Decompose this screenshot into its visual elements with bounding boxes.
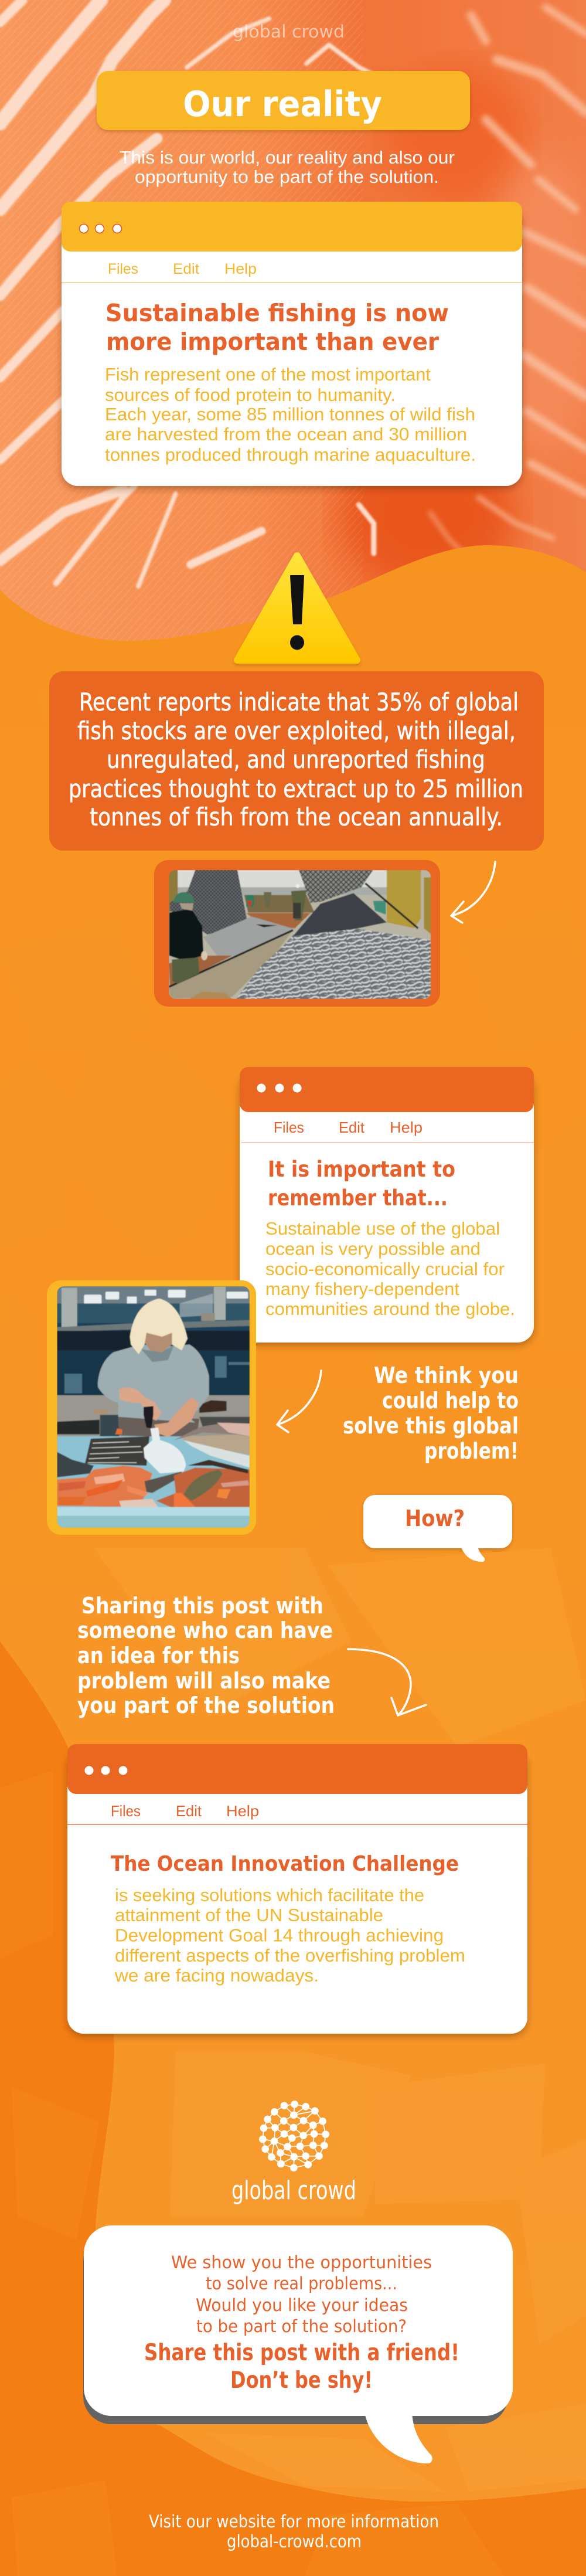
window body text: attainment of the UN Sustainable — [115, 1905, 383, 1925]
text: we think you could help: We think you — [374, 1362, 519, 1388]
text: sharing this post: problem will also make — [77, 1668, 331, 1694]
title banner — [97, 71, 470, 130]
window header — [62, 202, 522, 252]
window dots — [257, 1083, 301, 1093]
text: sharing this post: someone who can have — [77, 1617, 333, 1643]
window body text: Development Goal 14 through achieving — [115, 1925, 444, 1945]
title text: Our reality — [183, 84, 382, 125]
panel: window it is important — [240, 1067, 534, 1343]
window body text: Fish represent one of the most important — [105, 364, 431, 385]
window heading: Sustainable fishing is now — [105, 299, 449, 327]
bubble message: to solve real problems... — [206, 2273, 397, 2293]
text: we think you could help: could help to — [382, 1388, 519, 1413]
report text: tonnes of fish from the ocean annually. — [90, 803, 503, 831]
window header — [240, 1067, 534, 1112]
window dots — [84, 1766, 128, 1775]
window body text: we are facing nowadays. — [114, 1965, 319, 1986]
subtitle — [120, 147, 455, 187]
window body text: tonnes produced through marine aquaculture. — [105, 444, 476, 465]
bubble message: Would you like your ideas — [196, 2295, 408, 2315]
window menu: Files — [274, 1119, 304, 1136]
window body text: different aspects of the overfishing problem — [115, 1945, 465, 1966]
panel: recent reports — [49, 671, 544, 851]
text: sharing this post: an idea for this — [77, 1643, 240, 1668]
window menu: Help — [224, 261, 257, 277]
report text: Recent reports indicate that 35% of global — [79, 688, 519, 716]
subtitle: opportunity to be part of the solution. — [135, 166, 439, 187]
window body text: communities around the globe. — [265, 1299, 515, 1319]
window menu: Edit — [339, 1119, 365, 1136]
footer text: Visit our website for more information — [149, 2512, 439, 2531]
photo: fishmonger woman at harbour — [47, 1280, 256, 1535]
text: sharing this post: Sharing this post with — [81, 1593, 323, 1619]
window heading: remember that... — [268, 1185, 448, 1211]
window menu: Help — [226, 1802, 259, 1820]
text: sharing this post: you part of the solution — [77, 1693, 335, 1718]
window menu: Files — [108, 261, 138, 277]
window body text: Each year, some 85 million tonnes of wild fish — [105, 404, 475, 424]
bubble message: to be part of the solution? — [196, 2316, 407, 2336]
window menu — [111, 1802, 259, 1820]
window body text: many fishery-dependent — [265, 1279, 459, 1299]
window body text: are harvested from the ocean and 30 million — [105, 424, 467, 444]
speech bubble: share this post — [83, 2225, 513, 2463]
how text: How? — [405, 1506, 465, 1531]
window body text — [114, 1885, 465, 1986]
report text: unregulated, and unreported fishing — [107, 745, 485, 774]
bubble call to action: Share this post with a friend! — [144, 2340, 459, 2366]
footer text: global-crowd.com — [227, 2531, 362, 2551]
arrow: toward woman photo — [277, 1371, 321, 1432]
window heading: more important than ever — [106, 328, 440, 356]
window body text: sources of food protein to humanity. — [105, 385, 396, 405]
bubble call to action: Don’t be shy! — [230, 2367, 373, 2394]
footer text — [149, 2512, 439, 2551]
bubble message — [171, 2252, 432, 2336]
bubble call to action — [144, 2340, 459, 2394]
speech bubble: how — [363, 1495, 512, 1562]
window menu: Help — [390, 1119, 423, 1136]
window menu: Files — [111, 1802, 141, 1820]
subtitle: This is our world, our reality and also our — [120, 147, 455, 168]
window menu: Edit — [176, 1802, 202, 1820]
text: we think you could help: solve this global — [343, 1413, 519, 1439]
window body text — [105, 364, 476, 465]
window header — [67, 1744, 527, 1794]
report text: fish stocks are over exploited, with illegal, — [77, 716, 516, 745]
bubble message: We show you the opportunities — [171, 2252, 432, 2272]
arrow: down to challenge window — [348, 1649, 426, 1715]
panel: window sustainable fishing — [62, 202, 522, 486]
text: sharing this post — [77, 1593, 335, 1718]
window dots — [80, 224, 122, 233]
logo text: global crowd: global crowd — [231, 2176, 356, 2205]
window body text: ocean is very possible and — [265, 1238, 481, 1259]
window heading — [105, 299, 449, 356]
window heading: The Ocean Innovation Challenge — [111, 1852, 459, 1876]
window menu — [108, 261, 257, 277]
photo: fishing boat deck with catch — [154, 860, 440, 1007]
window body text: Sustainable use of the global — [265, 1218, 500, 1239]
window body text — [265, 1218, 515, 1319]
report text — [69, 688, 523, 831]
panel: window ocean innovation challenge — [67, 1744, 527, 2034]
logo: network globe — [259, 2101, 329, 2171]
window heading: It is important to — [268, 1157, 455, 1182]
photo: salmon fillet background — [0, 0, 586, 645]
arrow: down to fishing photo — [451, 862, 495, 923]
text: we think you could help: problem! — [424, 1438, 519, 1464]
logo text: global crowd (top): global crowd — [233, 22, 345, 42]
window body text: socio-economically crucial for — [265, 1259, 505, 1279]
window body text: is seeking solutions which facilitate the — [115, 1885, 424, 1905]
window menu — [274, 1119, 423, 1136]
window heading — [268, 1157, 455, 1211]
text: we think you could help — [343, 1362, 519, 1464]
window menu: Edit — [173, 261, 199, 277]
icon: warning triangle — [237, 556, 357, 660]
